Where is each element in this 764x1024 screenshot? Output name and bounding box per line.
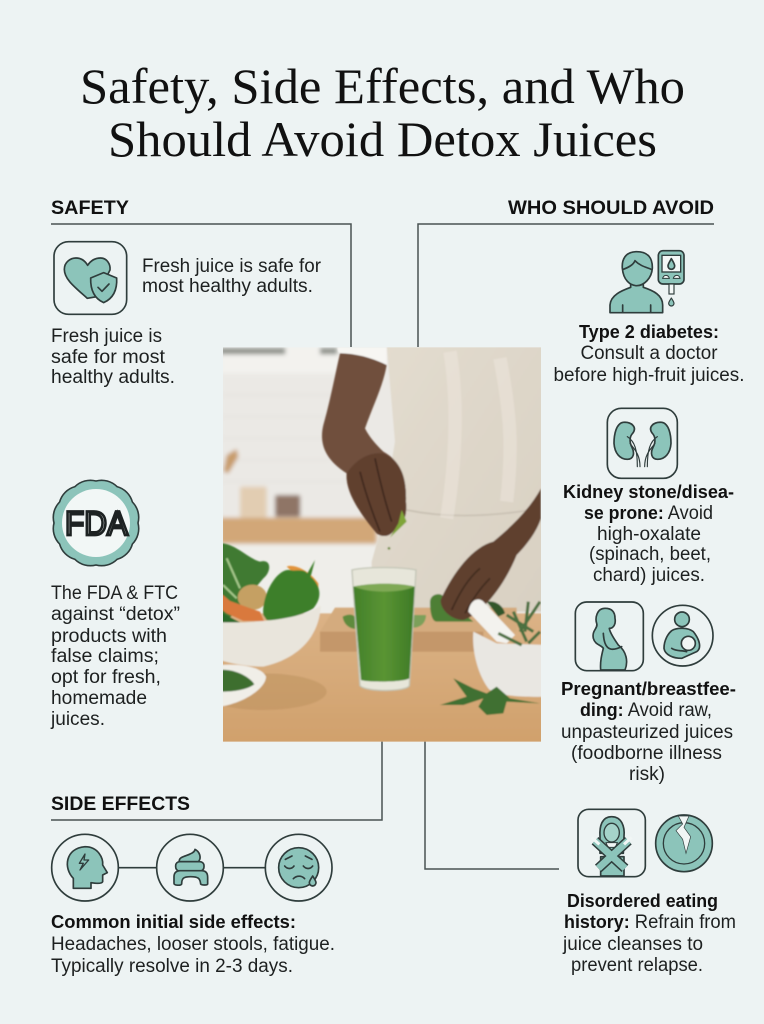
text: pregnant or breastfeeding: (foodborne illness: [571, 743, 722, 764]
icon: woman with crossed arms and broken plate: [578, 809, 712, 877]
icon: heart and shield: [54, 242, 127, 314]
cutting board: [331, 606, 518, 615]
parsley: [440, 678, 540, 715]
bowl and vegetables: [220, 543, 269, 622]
panel: safety: [50, 197, 322, 730]
text: FDA and FTC warning: The FDA & FTC: [51, 583, 178, 604]
text: fresh juice below icon: Fresh juice is: [51, 326, 162, 347]
text: fresh juice beside icon: most healthy adults.: [142, 276, 313, 297]
icon: pregnant woman and breastfeeding: [575, 602, 713, 671]
text: FDA and FTC warning: against “detox”: [51, 604, 180, 625]
text: pregnant or breastfeeding: [561, 678, 736, 785]
text: kidney stone or disease prone: [563, 481, 734, 586]
text: type 2 diabetes: Consult a doctor: [580, 343, 718, 364]
text: FDA and FTC warning: opt for fresh,: [51, 667, 161, 688]
photo: hands squeezing lime over green juice in kitchen: [200, 345, 545, 745]
text: fresh juice below icon: [51, 326, 175, 388]
icon: person with glucose meter: [610, 251, 684, 313]
panel: side effects: [51, 793, 335, 977]
icon: FDA badge: FDA: [65, 505, 128, 543]
text: FDA and FTC warning: [50, 583, 180, 730]
text: fresh juice beside icon: Fresh juice is safe for: [142, 256, 322, 277]
connector: safety: [51, 224, 351, 347]
text: pregnant or breastfeeding: risk): [629, 764, 665, 785]
mortar and pestle: [473, 632, 545, 697]
text: kidney stone or disease prone: high-oxalate: [597, 524, 701, 545]
text: disordered eating history: [562, 890, 736, 976]
text: common initial side effects: Headaches, looser stools, fatigue.: [51, 934, 335, 955]
icon: kidneys: [607, 408, 677, 478]
text: FDA and FTC warning: homemade: [51, 688, 147, 709]
text: disordered eating history: juice cleanses to: [562, 934, 703, 955]
panel: who should avoid: [508, 197, 744, 976]
text: disordered eating history: history: Refrain from: [564, 911, 736, 933]
text: pregnant or breastfeeding: ding: Avoid raw,: [580, 699, 712, 721]
heading: who should avoid: WHO SHOULD AVOID: [508, 197, 714, 219]
text: type 2 diabetes: Type 2 diabetes:: [579, 321, 719, 342]
text: kidney stone or disease prone: Kidney stone/disea-: [563, 481, 734, 502]
icon row: headache, loose stools, fatigue: [52, 834, 332, 901]
right hand and forearm: [441, 488, 541, 620]
text: pregnant or breastfeeding: Pregnant/breastfee-: [561, 678, 736, 699]
text: common initial side effects: Common initial side effects:: [51, 911, 296, 932]
text: fresh juice beside icon: [142, 256, 322, 297]
text: kidney stone or disease prone: se prone: Avoid: [584, 502, 713, 524]
text: fresh juice below icon: healthy adults.: [51, 367, 175, 388]
heading: safety: SAFETY: [51, 197, 129, 219]
connector: disordered eating: [425, 741, 559, 869]
text: disordered eating history: Disordered eating: [567, 890, 718, 911]
title: Safety, Side Effects, and Who: [80, 58, 685, 114]
cucumber: [430, 594, 473, 622]
table: [220, 613, 545, 745]
connector: side effects: [51, 741, 382, 820]
icon: FDA badge: [53, 480, 139, 566]
text: fresh juice below icon: safe for most: [51, 347, 166, 368]
glass of juice: [352, 567, 416, 690]
text: FDA and FTC warning: false claims;: [51, 646, 159, 667]
text: common initial side effects: Typically resolve in 2-3 days.: [51, 956, 293, 977]
text: type 2 diabetes: [554, 321, 744, 386]
text: pregnant or breastfeeding: unpasteurized juices: [561, 722, 733, 743]
text: FDA and FTC warning: products with: [51, 626, 167, 647]
small plate: [220, 665, 266, 707]
apron: [372, 345, 545, 612]
text: common initial side effects: [51, 911, 335, 977]
title: [80, 58, 685, 167]
heading: side effects: SIDE EFFECTS: [51, 793, 190, 815]
title: Should Avoid Detox Juices: [108, 111, 657, 167]
connector: who should avoid: [418, 224, 714, 347]
left arm and hand: [337, 347, 387, 365]
text: FDA and FTC warning: juices.: [50, 709, 105, 730]
text: kidney stone or disease prone: (spinach, beet,: [589, 544, 711, 565]
text: type 2 diabetes: before high-fruit juices.: [554, 365, 744, 386]
text: disordered eating history: prevent relapse.: [571, 955, 703, 976]
text: kidney stone or disease prone: chard) juices.: [593, 565, 705, 586]
